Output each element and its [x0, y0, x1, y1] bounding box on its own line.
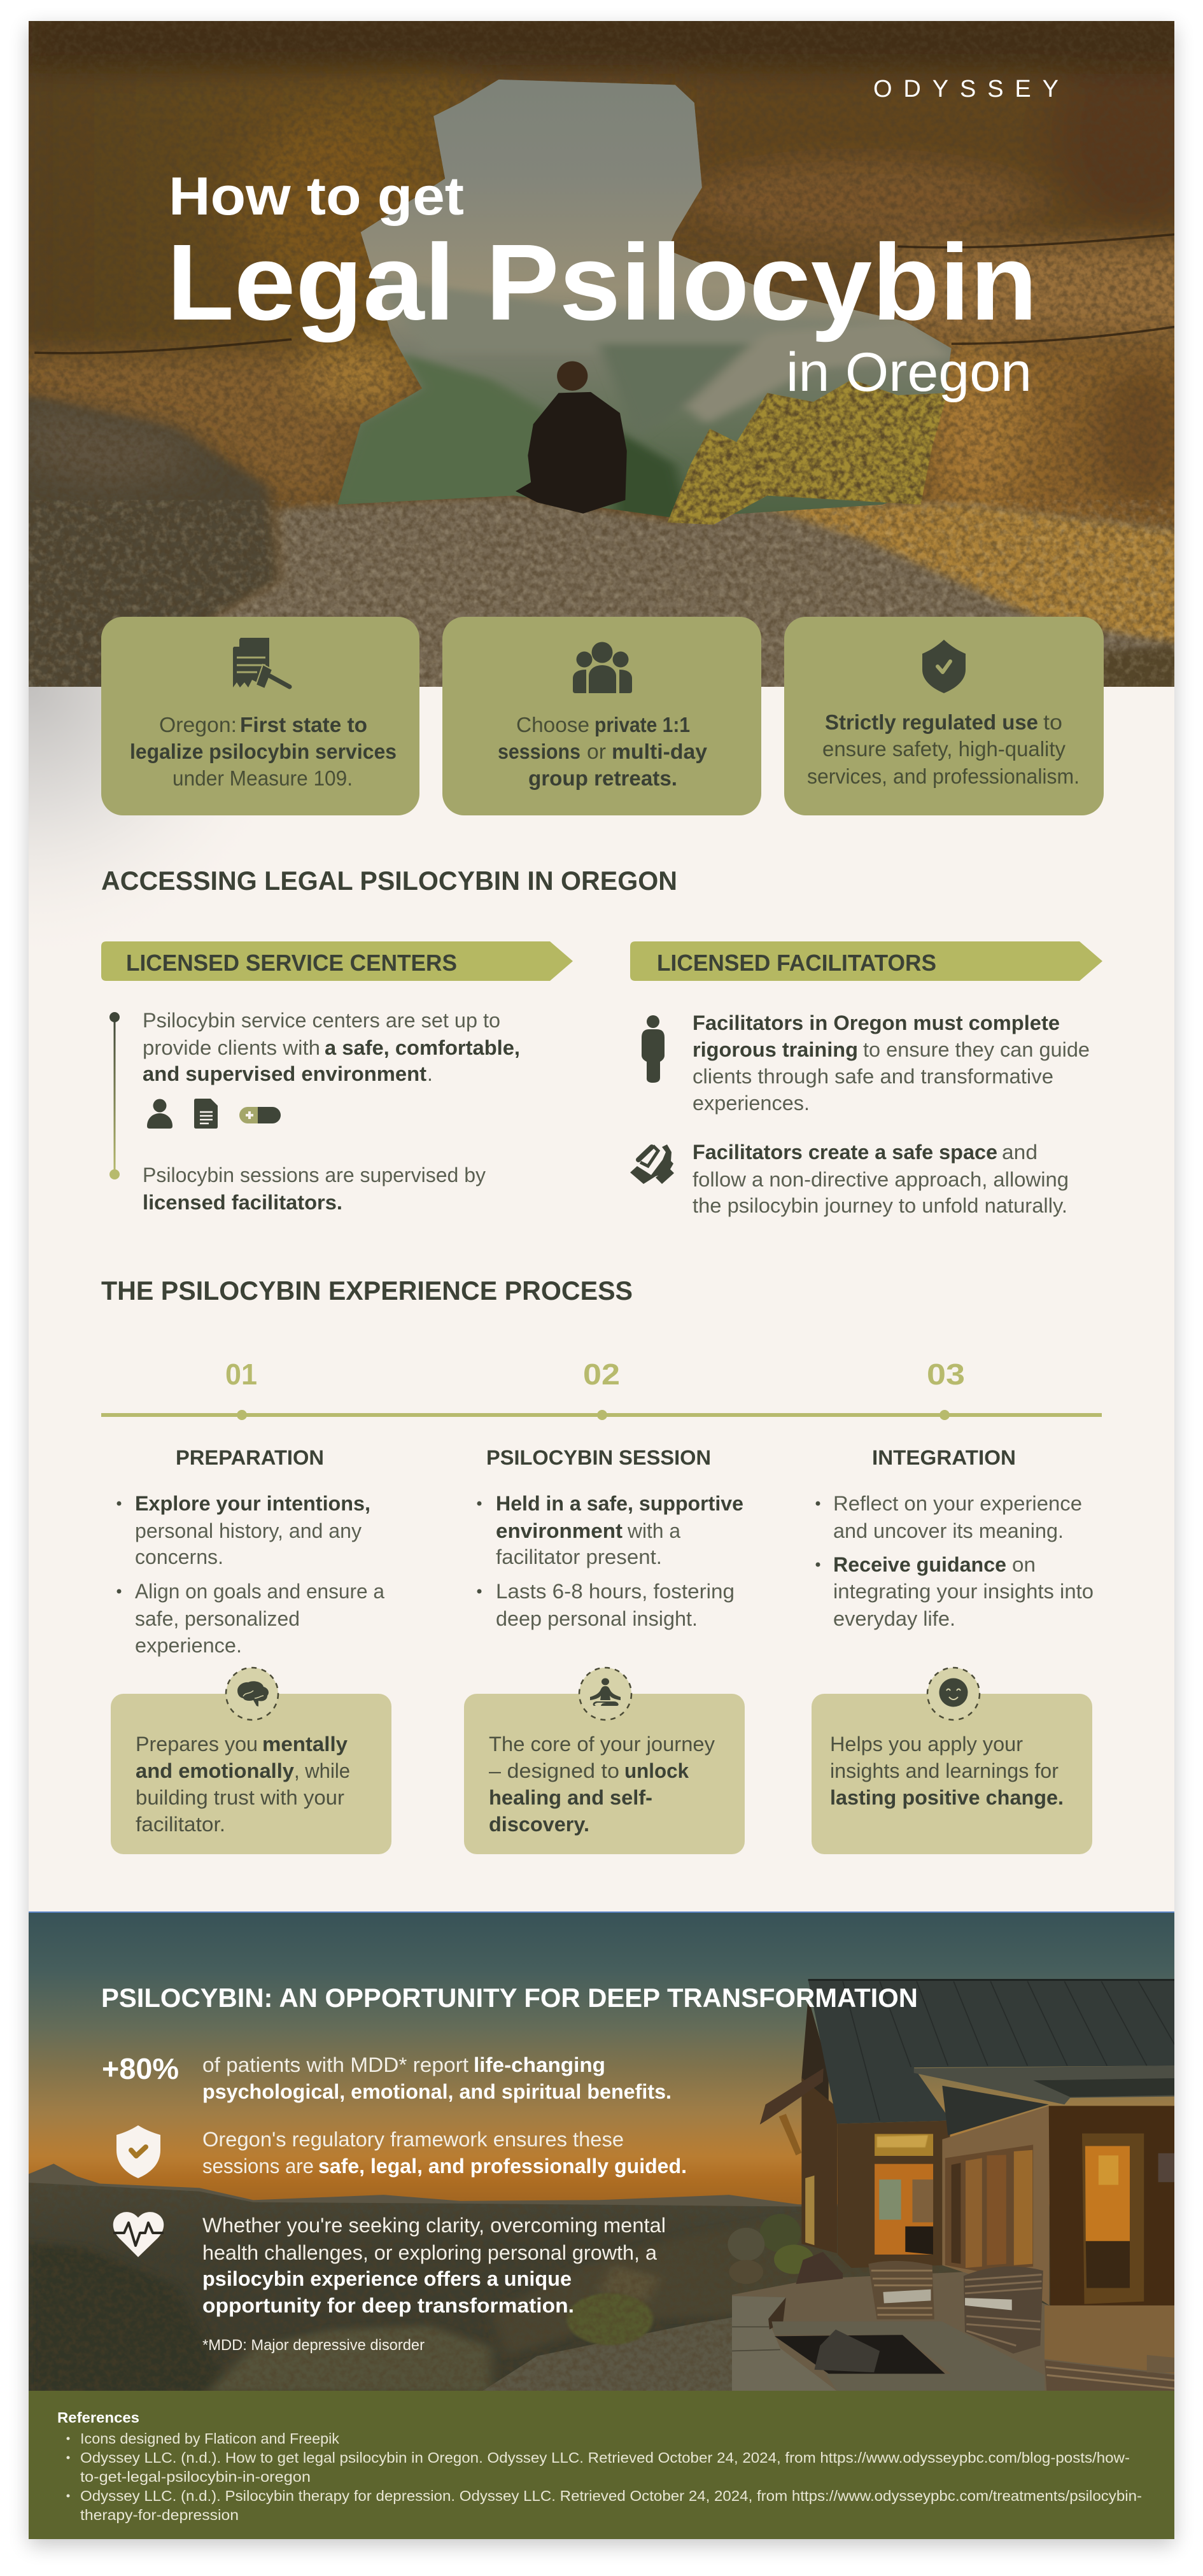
text: service centers description: Psilocybin service centers are set up to [143, 1009, 500, 1032]
card: strictly regulated [784, 617, 1104, 815]
bullets: preparation [117, 1492, 384, 1657]
bullets: preparation: safe, personalized [135, 1607, 300, 1630]
main roof [808, 1980, 1175, 2124]
card: prepares you: and emotionally [136, 1759, 294, 1782]
panel: step 2 psilocybin session [464, 1446, 745, 1854]
card: private sessions: multi-day [612, 740, 708, 763]
panel: step 1 preparation: PREPARATION [176, 1446, 324, 1469]
text: supervised sessions [143, 1164, 486, 1214]
bullets: session: facilitator present. [496, 1545, 662, 1568]
panel: references: therapy-for-depression [80, 2507, 239, 2523]
card: strictly regulated: to [1043, 710, 1062, 734]
bullets: session: deep personal insight. [496, 1607, 698, 1630]
panel: references: to-get-legal-psilocybin-in-oregon [80, 2468, 311, 2485]
panel: references: References [57, 2409, 139, 2426]
bullets: session: with a [627, 1519, 680, 1542]
text: rigorous training: Facilitators in Oregon must complete [693, 1011, 1060, 1034]
icon: capsule [239, 1107, 281, 1123]
bullets: preparation: concerns. [135, 1545, 223, 1568]
card: prepares you: mentally [262, 1733, 348, 1756]
card: core of your journey: The core of your journey [489, 1733, 715, 1756]
chairs [868, 2261, 1175, 2402]
panel: references: Odyssey LLC. (n.d.). How to get legal psilocybin in Oregon. Odyssey LLC. Retrieved October 24, 2024, from https://www.odysseypbc.com/blog-posts/how- [80, 2449, 1130, 2466]
card: strictly regulated: ensure safety, high-quality [822, 737, 1066, 761]
brand: ODYSSEY: ODYSSEY [873, 76, 1059, 102]
card: helps you apply: Helps you apply your [830, 1733, 1023, 1756]
text: supervised sessions: licensed facilitators. [143, 1191, 342, 1214]
fact: deep transformation: Whether you're seeking clarity, overcoming mental [202, 2214, 666, 2237]
bullets: session: Lasts 6-8 hours, fostering [496, 1580, 735, 1603]
panel: step 1 preparation [111, 1446, 391, 1854]
bullets: preparation: Align on goals and ensure a [135, 1580, 384, 1603]
heading: deep transformation: PSILOCYBIN: AN OPPORTUNITY FOR DEEP TRANSFORMATION [101, 1983, 918, 2013]
lower roof [914, 2066, 1175, 2104]
fact: deep transformation: health challenges, or exploring personal growth, a [202, 2241, 657, 2264]
panel: licensed service centers [101, 941, 573, 1214]
card: strictly regulated: services, and professionalism. [807, 764, 1080, 788]
stat: 80 percent: +80% [102, 2052, 179, 2085]
card: private sessions: group retreats. [528, 766, 677, 790]
bullets: integration [816, 1492, 1094, 1630]
card: core of your journey: healing and self- [489, 1786, 652, 1809]
hero photo: man in cave looking over canyon [0, 0, 1203, 696]
panel: licensed facilitators [630, 941, 1102, 1217]
fact: deep transformation: opportunity for deep transformation. [202, 2294, 574, 2317]
text: rigorous training: to ensure they can guide [863, 1038, 1090, 1061]
card: helps you apply [812, 1694, 1092, 1854]
shrubs [760, 2214, 801, 2253]
card: core of your journey: – designed to [489, 1759, 619, 1782]
bullets: session: environment [496, 1519, 623, 1542]
card: private sessions [442, 617, 761, 815]
card: first state: legalize psilocybin services [130, 740, 397, 763]
text: safe space: the psilocybin journey to unfold naturally. [693, 1194, 1067, 1217]
card: core of your journey: discovery. [489, 1813, 589, 1836]
heading: experience process: THE PSILOCYBIN EXPERIENCE PROCESS [101, 1276, 633, 1306]
panel: step 2 psilocybin session: PSILOCYBIN SESSION [486, 1446, 711, 1469]
fact: deep transformation [113, 2212, 666, 2317]
card: core of your journey [464, 1694, 745, 1854]
panel: key fact cards [101, 617, 1104, 815]
panel: step 3 integration: INTEGRATION [872, 1446, 1016, 1469]
title [167, 166, 1038, 403]
text: service centers description: provide clients with [143, 1036, 320, 1059]
bullets: integration: integrating your insights into [833, 1580, 1094, 1603]
timeline rule [101, 1410, 1102, 1420]
fact: deep transformation: psilocybin experience offers a unique [202, 2267, 572, 2290]
card: first state: First state to [240, 713, 367, 736]
title: in Oregon [786, 342, 1032, 403]
rock masses [0, 0, 1203, 696]
panel: references: Icons designed by Flaticon and Freepik [80, 2430, 339, 2447]
card: core of your journey: unlock [624, 1759, 689, 1782]
fact: regulatory framework: Oregon's regulatory framework ensures these [202, 2128, 624, 2151]
icon: heart with pulse [113, 2212, 164, 2257]
panel: references [29, 2391, 1174, 2539]
icon: white shield [116, 2125, 160, 2178]
stone bench and fire pit [732, 2296, 837, 2391]
footnote: *MDD: Major depressive disorder [202, 2337, 425, 2354]
fact: regulatory framework: sessions are [202, 2155, 314, 2178]
thin blue edge [29, 1911, 1174, 1913]
icon: meditating person in dashed circle [579, 1668, 631, 1720]
card: helps you apply: lasting positive change. [830, 1786, 1064, 1809]
text: service centers description: and supervised environment [143, 1062, 426, 1085]
text: safe space: follow a non-directive approach, allowing [693, 1168, 1069, 1191]
card: first state [101, 617, 419, 815]
card: prepares you: , while [294, 1759, 350, 1782]
bullets: preparation: experience. [135, 1634, 242, 1657]
text: safe space: Facilitators create a safe space [693, 1141, 997, 1164]
card: helps you apply: insights and learnings for [830, 1759, 1059, 1782]
left gable [801, 1997, 829, 2123]
bottom photo: lodge at sunset [23, 1910, 1203, 2402]
bullets: preparation: Explore your intentions, [135, 1492, 370, 1515]
entry wall [837, 2120, 951, 2268]
bullets: integration: on [1012, 1553, 1036, 1576]
bullets: integration: everyday life. [833, 1607, 955, 1630]
icon: standing person [642, 1015, 665, 1083]
sliding door [945, 2144, 1033, 2272]
yellow tree [668, 381, 947, 524]
text: supervised sessions: Psilocybin sessions are supervised by [143, 1164, 486, 1186]
card: strictly regulated: Strictly regulated use [825, 710, 1038, 734]
bullets: preparation: personal history, and any [135, 1519, 362, 1542]
text: rigorous training: clients through safe and transformative [693, 1065, 1053, 1088]
text: service centers description: . [427, 1062, 433, 1085]
icon: smiling face in dashed circle [927, 1668, 980, 1720]
title: How to get [169, 166, 464, 226]
card: prepares you: Prepares you [136, 1733, 258, 1756]
stat: 80 percent: life-changing [474, 2053, 605, 2076]
card: prepares you: building trust with your [136, 1786, 344, 1809]
card: first state: under Measure 109. [172, 766, 353, 790]
card: private sessions: or [587, 740, 606, 763]
tag: licensed service centers: LICENSED SERVICE CENTERS [126, 950, 457, 976]
text: service centers description: a safe, comfortable, [325, 1036, 520, 1059]
card: private sessions: sessions [498, 740, 580, 763]
step numbers: 01 [225, 1358, 257, 1391]
card: first state: Oregon: [159, 713, 237, 736]
fact: regulatory framework [116, 2125, 687, 2178]
icon: clasped hands [630, 1144, 674, 1184]
fact: regulatory framework: safe, legal, and professionally guided. [318, 2155, 687, 2178]
terrace floor [732, 2272, 1186, 2402]
landscape [23, 1910, 1203, 2395]
rock seams [34, 234, 1174, 353]
card: private sessions: private 1:1 [594, 713, 690, 736]
corner shading under hero [29, 687, 474, 1005]
text: safe space [693, 1141, 1069, 1217]
text: service centers description [143, 1009, 520, 1085]
heading: accessing legal psilocybin: ACCESSING LEGAL PSILOCYBIN IN OREGON [101, 866, 677, 896]
step numbers [225, 1358, 965, 1391]
text: rigorous training [693, 1011, 1090, 1115]
tag: licensed service centers [101, 941, 573, 981]
card: prepares you: facilitator. [136, 1813, 225, 1836]
step numbers: 03 [927, 1358, 965, 1391]
bullets: session: Held in a safe, supportive [496, 1492, 743, 1515]
title: Legal Psilocybin [167, 222, 1038, 343]
rock texture [23, 18, 1181, 692]
bullets: integration: Reflect on your experience [833, 1492, 1082, 1515]
tan wall [942, 2106, 1050, 2305]
panel: step 3 integration [812, 1446, 1094, 1854]
bullets: integration: and uncover its meaning. [833, 1519, 1064, 1542]
step numbers: 02 [583, 1358, 620, 1391]
card: private sessions: Choose [516, 713, 589, 736]
bullets: integration: Receive guidance [833, 1553, 1006, 1576]
panel: references: Odyssey LLC. (n.d.). Psilocybin therapy for depression. Odyssey LLC. Retrieved October 24, 2024, from https://www.odysseypbc.com/treatments/psilocybin- [80, 2488, 1142, 2504]
lodge [728, 1980, 1186, 2402]
brown right wall [1049, 2106, 1186, 2305]
sky opening [330, 76, 967, 527]
icon: group of people [573, 642, 632, 693]
seated man [516, 362, 627, 514]
text: rigorous training: rigorous training [693, 1038, 858, 1061]
timeline [109, 1012, 120, 1179]
card: prepares you [111, 1694, 391, 1854]
stat: 80 percent: of patients with MDD* report [202, 2053, 468, 2076]
text: safe space: and [1002, 1141, 1038, 1164]
stat: 80 percent: psychological, emotional, and spiritual benefits. [202, 2080, 672, 2103]
icon: brain in dashed circle [226, 1668, 278, 1720]
icon: person [147, 1099, 172, 1129]
bullets: session [477, 1492, 743, 1630]
icon: document [194, 1099, 218, 1129]
tag: licensed facilitators [630, 941, 1102, 981]
icon: shield with check [922, 640, 966, 693]
stat: 80 percent [102, 2052, 672, 2103]
tag: licensed facilitators: LICENSED FACILITATORS [657, 950, 936, 976]
text: rigorous training: experiences. [693, 1092, 810, 1115]
dark siding [942, 2086, 1049, 2136]
icon: document and gavel [233, 638, 290, 689]
